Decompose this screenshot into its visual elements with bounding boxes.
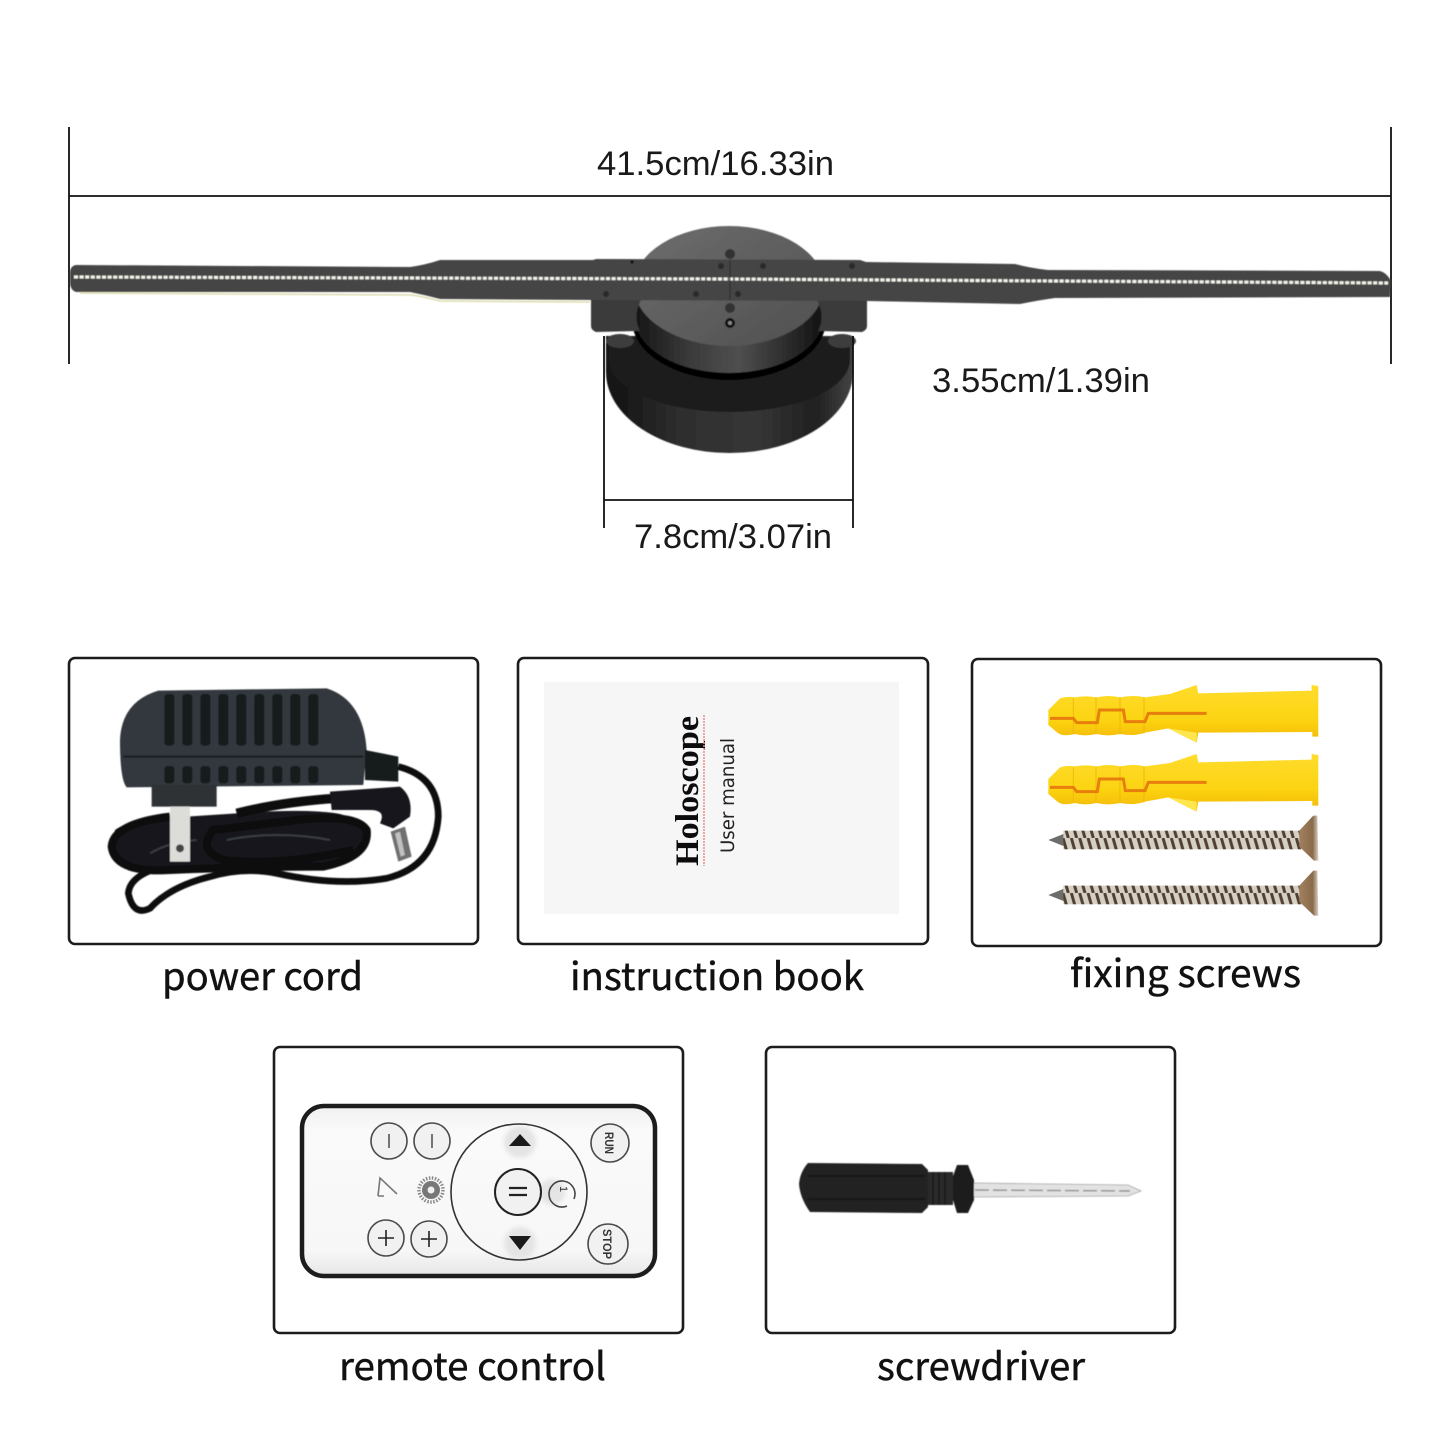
caption: fixing screws: fixing screws bbox=[1070, 943, 1301, 998]
panel: power cord bbox=[69, 658, 478, 1001]
caption: power cord: power cord bbox=[162, 946, 363, 1001]
panel: instruction book bbox=[518, 658, 928, 1001]
icon: remote control bbox=[302, 1106, 655, 1276]
screws on disc and arms bbox=[603, 249, 855, 328]
hub base shoulder bbox=[609, 338, 850, 412]
icon: remote control: STOP bbox=[600, 1229, 612, 1259]
LED strip bbox=[74, 277, 1388, 283]
panel: remote control bbox=[274, 1047, 683, 1391]
hub base mounting recess left bbox=[606, 334, 634, 348]
hub base mounting recess right bbox=[828, 334, 856, 348]
hub rotor side bbox=[635, 286, 823, 373]
dimension: total width 41.5cm: 41.5cm/16.33in bbox=[597, 145, 834, 183]
screw 2 bbox=[1048, 871, 1318, 916]
booklet title: Holoscope bbox=[670, 716, 706, 866]
icon: booklet cover bbox=[544, 682, 899, 914]
mounting bracket right bbox=[816, 298, 867, 332]
icon: remote control: RUN bbox=[602, 1132, 614, 1154]
icon: power adapter and cable bbox=[112, 688, 438, 911]
device: holographic fan with hub and blades bbox=[70, 226, 1391, 453]
caption: screwdriver: screwdriver bbox=[877, 1336, 1085, 1391]
caption: instruction book: instruction book bbox=[570, 946, 864, 1001]
booklet title underline bbox=[703, 715, 705, 866]
hub top disc bbox=[634, 226, 824, 346]
yellow wall plug 2 bbox=[1048, 754, 1318, 812]
yellow edge highlight bbox=[80, 293, 590, 302]
dimension: base diameter 7.8cm: 7.8cm/3.07in bbox=[634, 518, 832, 556]
screw 1 bbox=[1048, 816, 1318, 861]
panel: screwdriver bbox=[766, 1047, 1175, 1391]
yellow wall plug 1 bbox=[1048, 685, 1318, 743]
hub base bbox=[606, 336, 853, 453]
caption: remote control: remote control bbox=[339, 1336, 606, 1391]
icon: remote control: 1 bbox=[557, 1186, 569, 1192]
panel: fixing screws bbox=[972, 659, 1381, 998]
mounting bracket left bbox=[591, 298, 642, 332]
icon: wall plugs and screws bbox=[1048, 685, 1318, 916]
icon: screwdriver bbox=[799, 1163, 1141, 1213]
hub dark ring bbox=[632, 320, 826, 380]
dimension: height 3.55cm: 3.55cm/1.39in bbox=[932, 362, 1150, 400]
booklet subtitle: User manual bbox=[717, 738, 739, 853]
blade arms bbox=[70, 259, 1391, 304]
